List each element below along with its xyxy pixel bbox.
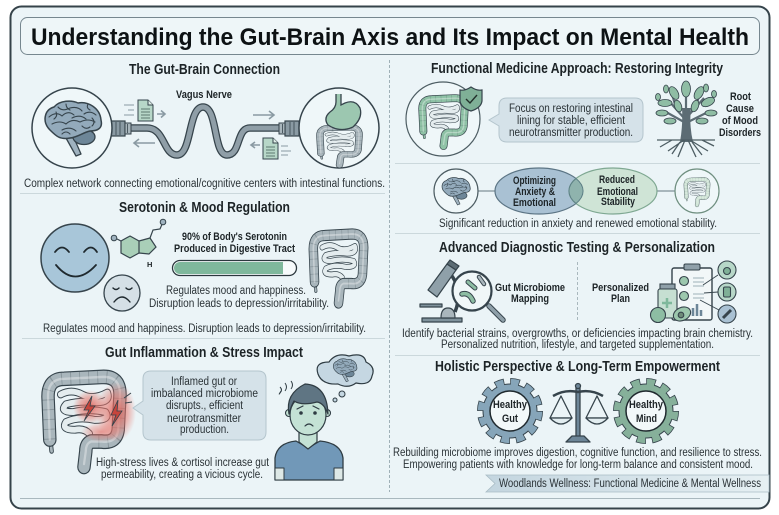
icon: healthy gut with shield [406, 82, 482, 156]
icon: brain in circle [32, 88, 112, 168]
label: personalized plan: Personalized [592, 282, 649, 294]
icon: inflamed intestines [48, 377, 136, 467]
label: gut microbiome mapping: Mapping [511, 293, 549, 305]
stat text: 90 percent: 90% of Body's Serotonin [182, 231, 287, 243]
label: optimizing [513, 175, 556, 209]
caption: Personalized nutrition, lifestyle, and targeted supplementation. [441, 339, 714, 351]
icon: stress squiggles [279, 381, 292, 394]
icon: brain circle [434, 169, 478, 213]
icon: document and arrow to brain [251, 138, 291, 159]
callout: inflamed gut: neurotransmitter [167, 413, 241, 425]
callout: inflamed gut [133, 371, 266, 440]
callout: inflamed gut: production. [180, 424, 229, 436]
label: personalized plan: Plan [611, 293, 630, 305]
icon: healthy mind gear [618, 384, 674, 438]
label: reduced: Emotional [597, 186, 638, 198]
label: root cause of mood disorders: Root [730, 91, 751, 103]
icon: healthy gut gear: Gut [502, 413, 518, 425]
text: high stress: permeability, creating a vicious cycle. [101, 469, 263, 481]
label: reduced: Reduced [599, 174, 635, 186]
icon: vagus nerve cable [111, 107, 299, 155]
label: gut microbiome mapping [495, 282, 565, 305]
label: root cause of mood disorders: Cause [726, 103, 754, 115]
ellipse overlap [569, 178, 583, 204]
label: vagus nerve: Vagus Nerve [176, 89, 232, 101]
label: reduced: Stability [601, 196, 636, 208]
icon: healthy gut gear [482, 384, 538, 438]
icon: serotonin molecule: H [147, 260, 152, 269]
panel: holistic perspective [393, 359, 762, 471]
callout: inflamed gut: imbalanced microbiome [151, 388, 258, 400]
callout: restoring lining: Focus on restoring intestinal [509, 103, 633, 115]
progress bar: 90 percent [172, 260, 296, 276]
panel: optimizing stability [434, 168, 719, 230]
icon: document and arrow to gut [124, 100, 165, 121]
caption [402, 328, 753, 351]
icon: arrow toward gut [253, 111, 274, 119]
icon: sad face [104, 275, 140, 311]
callout: restoring lining: lining for stable, efficient [517, 115, 626, 127]
label: optimizing: Emotional [513, 197, 556, 209]
footer banner [486, 475, 769, 492]
icon: serotonin molecule [111, 219, 166, 269]
panel: the gut-brain connection [24, 62, 385, 190]
label: root cause of mood disorders [719, 91, 761, 139]
text: regulates mood: Regulates mood and happiness. [166, 285, 306, 297]
panel: serotonin and mood regulation [41, 200, 366, 335]
icon: stomach and intestines in circle [299, 88, 379, 168]
callout: inflamed gut: Inflamed gut or [171, 376, 237, 388]
icon: thought bubble with brain [317, 355, 373, 402]
text: high stress: High-stress lives & cortisol increase gut [96, 457, 270, 469]
callout: restoring lining [489, 98, 643, 142]
stat text: 90 percent [174, 231, 295, 255]
caption: Regulates mood and happiness. Disruption leads to depression/irritability. [43, 323, 366, 335]
ellipse: reduced emotional stability [569, 168, 657, 214]
heading: advanced diagnostic: Advanced Diagnostic Testing & Personalization [439, 240, 715, 256]
text: regulates mood: Disruption leads to depression/irritability. [149, 298, 329, 310]
label: root cause of mood disorders: of Mood [722, 115, 758, 127]
label: reduced [597, 174, 638, 208]
icon: healthy gut gear: Healthy [493, 399, 528, 411]
label: root cause of mood disorders: Disorders [719, 127, 761, 139]
label: optimizing: Anxiety & [515, 186, 555, 198]
title: Understanding the Gut-Brain Axis and Its Impact on Mental Health [31, 24, 749, 51]
label: gut microbiome mapping: Gut Microbiome [495, 282, 565, 294]
heading: gut inflammation: Gut Inflammation & Stress Impact [105, 345, 303, 361]
heading: serotonin: Serotonin & Mood Regulation [119, 200, 290, 216]
panel: gut inflammation and stress [48, 345, 373, 481]
ellipse: optimizing anxiety and emotional [495, 168, 583, 214]
panel: advanced diagnostic testing [402, 240, 753, 351]
connector lines [478, 190, 675, 192]
label: personalized plan [592, 282, 649, 305]
text: high stress [96, 457, 270, 481]
icon: healthy mind gear: Healthy [629, 399, 664, 411]
icon: microscope and magnifier [420, 260, 503, 322]
icon: healthy mind gear: Mind [636, 413, 657, 425]
panel: functional medicine approach [406, 61, 761, 157]
icon: tree with roots [656, 81, 717, 157]
heading: holistic perspective: Holistic Perspective & Long-Term Empowerment [435, 359, 720, 375]
caption: Complex network connecting emotional/cognitive centers with intestinal functions. [24, 178, 385, 190]
caption [393, 447, 762, 471]
icon: balance scales [550, 384, 608, 442]
icon: arrow toward brain [134, 139, 155, 147]
icon: gut circle [675, 169, 719, 213]
text: regulates mood [149, 285, 329, 310]
icon: stressed person [275, 384, 343, 480]
icon: clipboard plan and supplements [650, 261, 736, 324]
callout: inflamed gut: disrupts., efficient [166, 400, 244, 412]
stat text: 90 percent: Produced in Digestive Tract [174, 243, 295, 255]
label: optimizing: Optimizing [513, 175, 556, 187]
icon: happy face [41, 224, 109, 292]
callout: restoring lining: neurotransmitter production. [509, 127, 633, 139]
caption: Significant reduction in anxiety and renewed emotional stability. [439, 218, 717, 230]
heading: the gut-brain connection: The Gut-Brain Connection [129, 62, 280, 78]
icon: intestines [313, 234, 364, 303]
heading: functional medicine: Functional Medicine Approach: Restoring Integrity [431, 61, 723, 77]
